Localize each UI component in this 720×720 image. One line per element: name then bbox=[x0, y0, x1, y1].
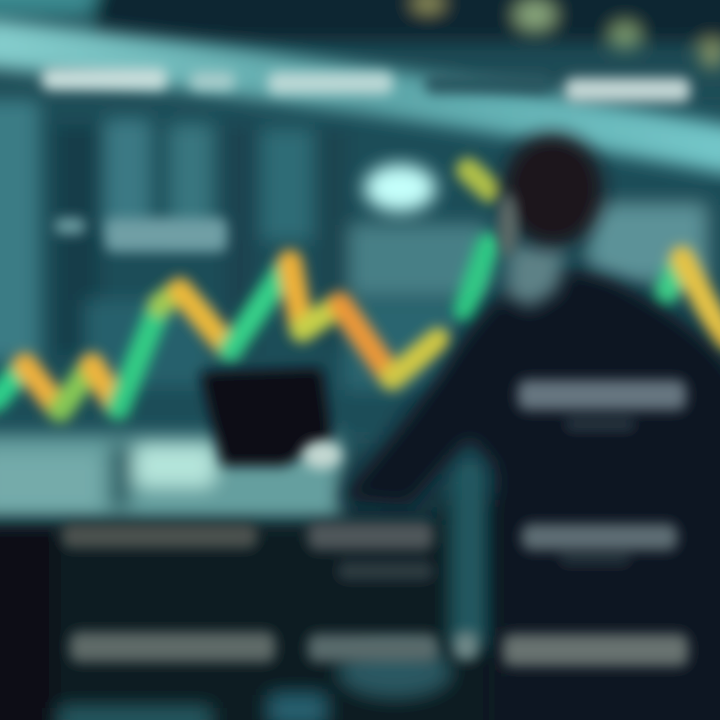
laptop silhouette bbox=[200, 368, 332, 466]
desk surface bbox=[0, 435, 340, 520]
blurred bottom captions bbox=[62, 522, 688, 666]
wall columns panel bbox=[0, 100, 720, 435]
person: hand bbox=[302, 441, 342, 469]
person: body bbox=[340, 269, 720, 720]
person: head bbox=[503, 134, 603, 246]
blurred panel text on suit bbox=[518, 380, 686, 564]
blurred heading text bbox=[42, 68, 690, 102]
person: face edge bbox=[498, 193, 518, 257]
person silhouette bbox=[302, 134, 720, 720]
person: neck and collar bbox=[505, 245, 565, 308]
light teal arched beam bbox=[0, 42, 720, 152]
line chart bbox=[0, 170, 720, 410]
glowing cyan screen bbox=[364, 164, 436, 212]
bottom dark panel bbox=[0, 455, 720, 720]
chart segment: rising green bbox=[0, 365, 25, 400]
blurred secondary wall text bbox=[55, 218, 227, 252]
top dark ceiling band bbox=[0, 0, 720, 68]
